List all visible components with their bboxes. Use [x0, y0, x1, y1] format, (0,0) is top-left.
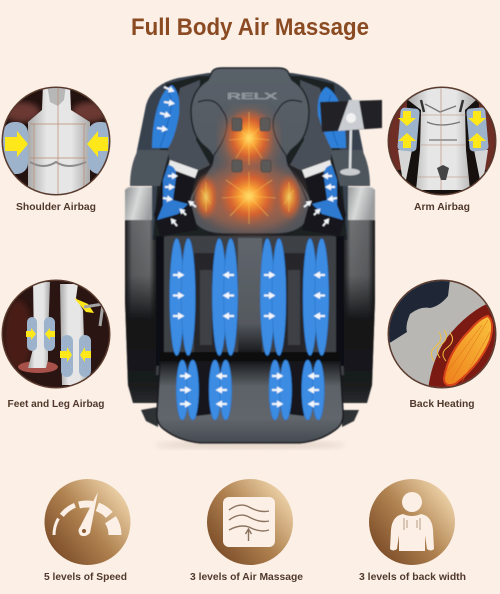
back cushion — [189, 68, 311, 234]
label: arm airbag: Arm Airbag — [414, 201, 470, 213]
leg airbags lower — [176, 360, 324, 420]
shoulder airbag left — [152, 85, 179, 148]
inner back panel right — [290, 80, 332, 175]
cushion seams — [192, 100, 308, 205]
brand logo: RELX — [227, 92, 279, 101]
massage chair — [125, 68, 382, 449]
label: feet and leg airbag: Feet and Leg Airbag — [8, 398, 104, 410]
side recess left — [154, 170, 198, 236]
label: speed levels: 5 levels of Speed — [44, 571, 127, 583]
side column left — [125, 187, 160, 403]
side airbag left — [157, 165, 196, 226]
side column right — [340, 187, 375, 403]
label: shoulder airbag: Shoulder Airbag — [16, 201, 96, 213]
thigh section — [156, 236, 344, 375]
white trim right — [302, 160, 332, 178]
leg airbags upper — [170, 238, 329, 356]
tablet on stand — [320, 100, 382, 176]
inset: arm airbag — [387, 85, 499, 197]
title: Full Body Air Massage — [131, 14, 369, 41]
armrest top right — [331, 150, 370, 186]
white trim left — [168, 160, 198, 178]
inset: back heating — [387, 279, 499, 392]
side airbag right — [304, 165, 343, 226]
thigh recess panels — [156, 236, 344, 366]
label: back heating: Back Heating — [410, 398, 474, 410]
airbag arrows — [173, 275, 325, 404]
icon: speed gauge — [44, 479, 130, 565]
inset: shoulder airbag — [0, 85, 113, 197]
icon: air massage levels — [207, 479, 293, 565]
foot cushion — [157, 362, 343, 443]
massage nodes — [232, 118, 271, 172]
foot recess panels — [196, 362, 304, 416]
back shell — [132, 73, 368, 240]
heating glow — [193, 108, 302, 230]
side recess right — [302, 170, 346, 236]
inset: feet and leg airbag — [0, 279, 112, 391]
chair base feet — [141, 407, 359, 427]
armrest top left — [130, 150, 169, 186]
chair floor shadow — [155, 441, 345, 449]
shoulder airbag right — [318, 87, 346, 148]
inner back recess — [153, 76, 347, 240]
label: back width levels: 3 levels of back width — [359, 571, 466, 583]
inner back panel left — [168, 80, 210, 175]
label: air massage levels: 3 levels of Air Massage — [190, 571, 303, 583]
icon: back width levels — [369, 479, 455, 565]
